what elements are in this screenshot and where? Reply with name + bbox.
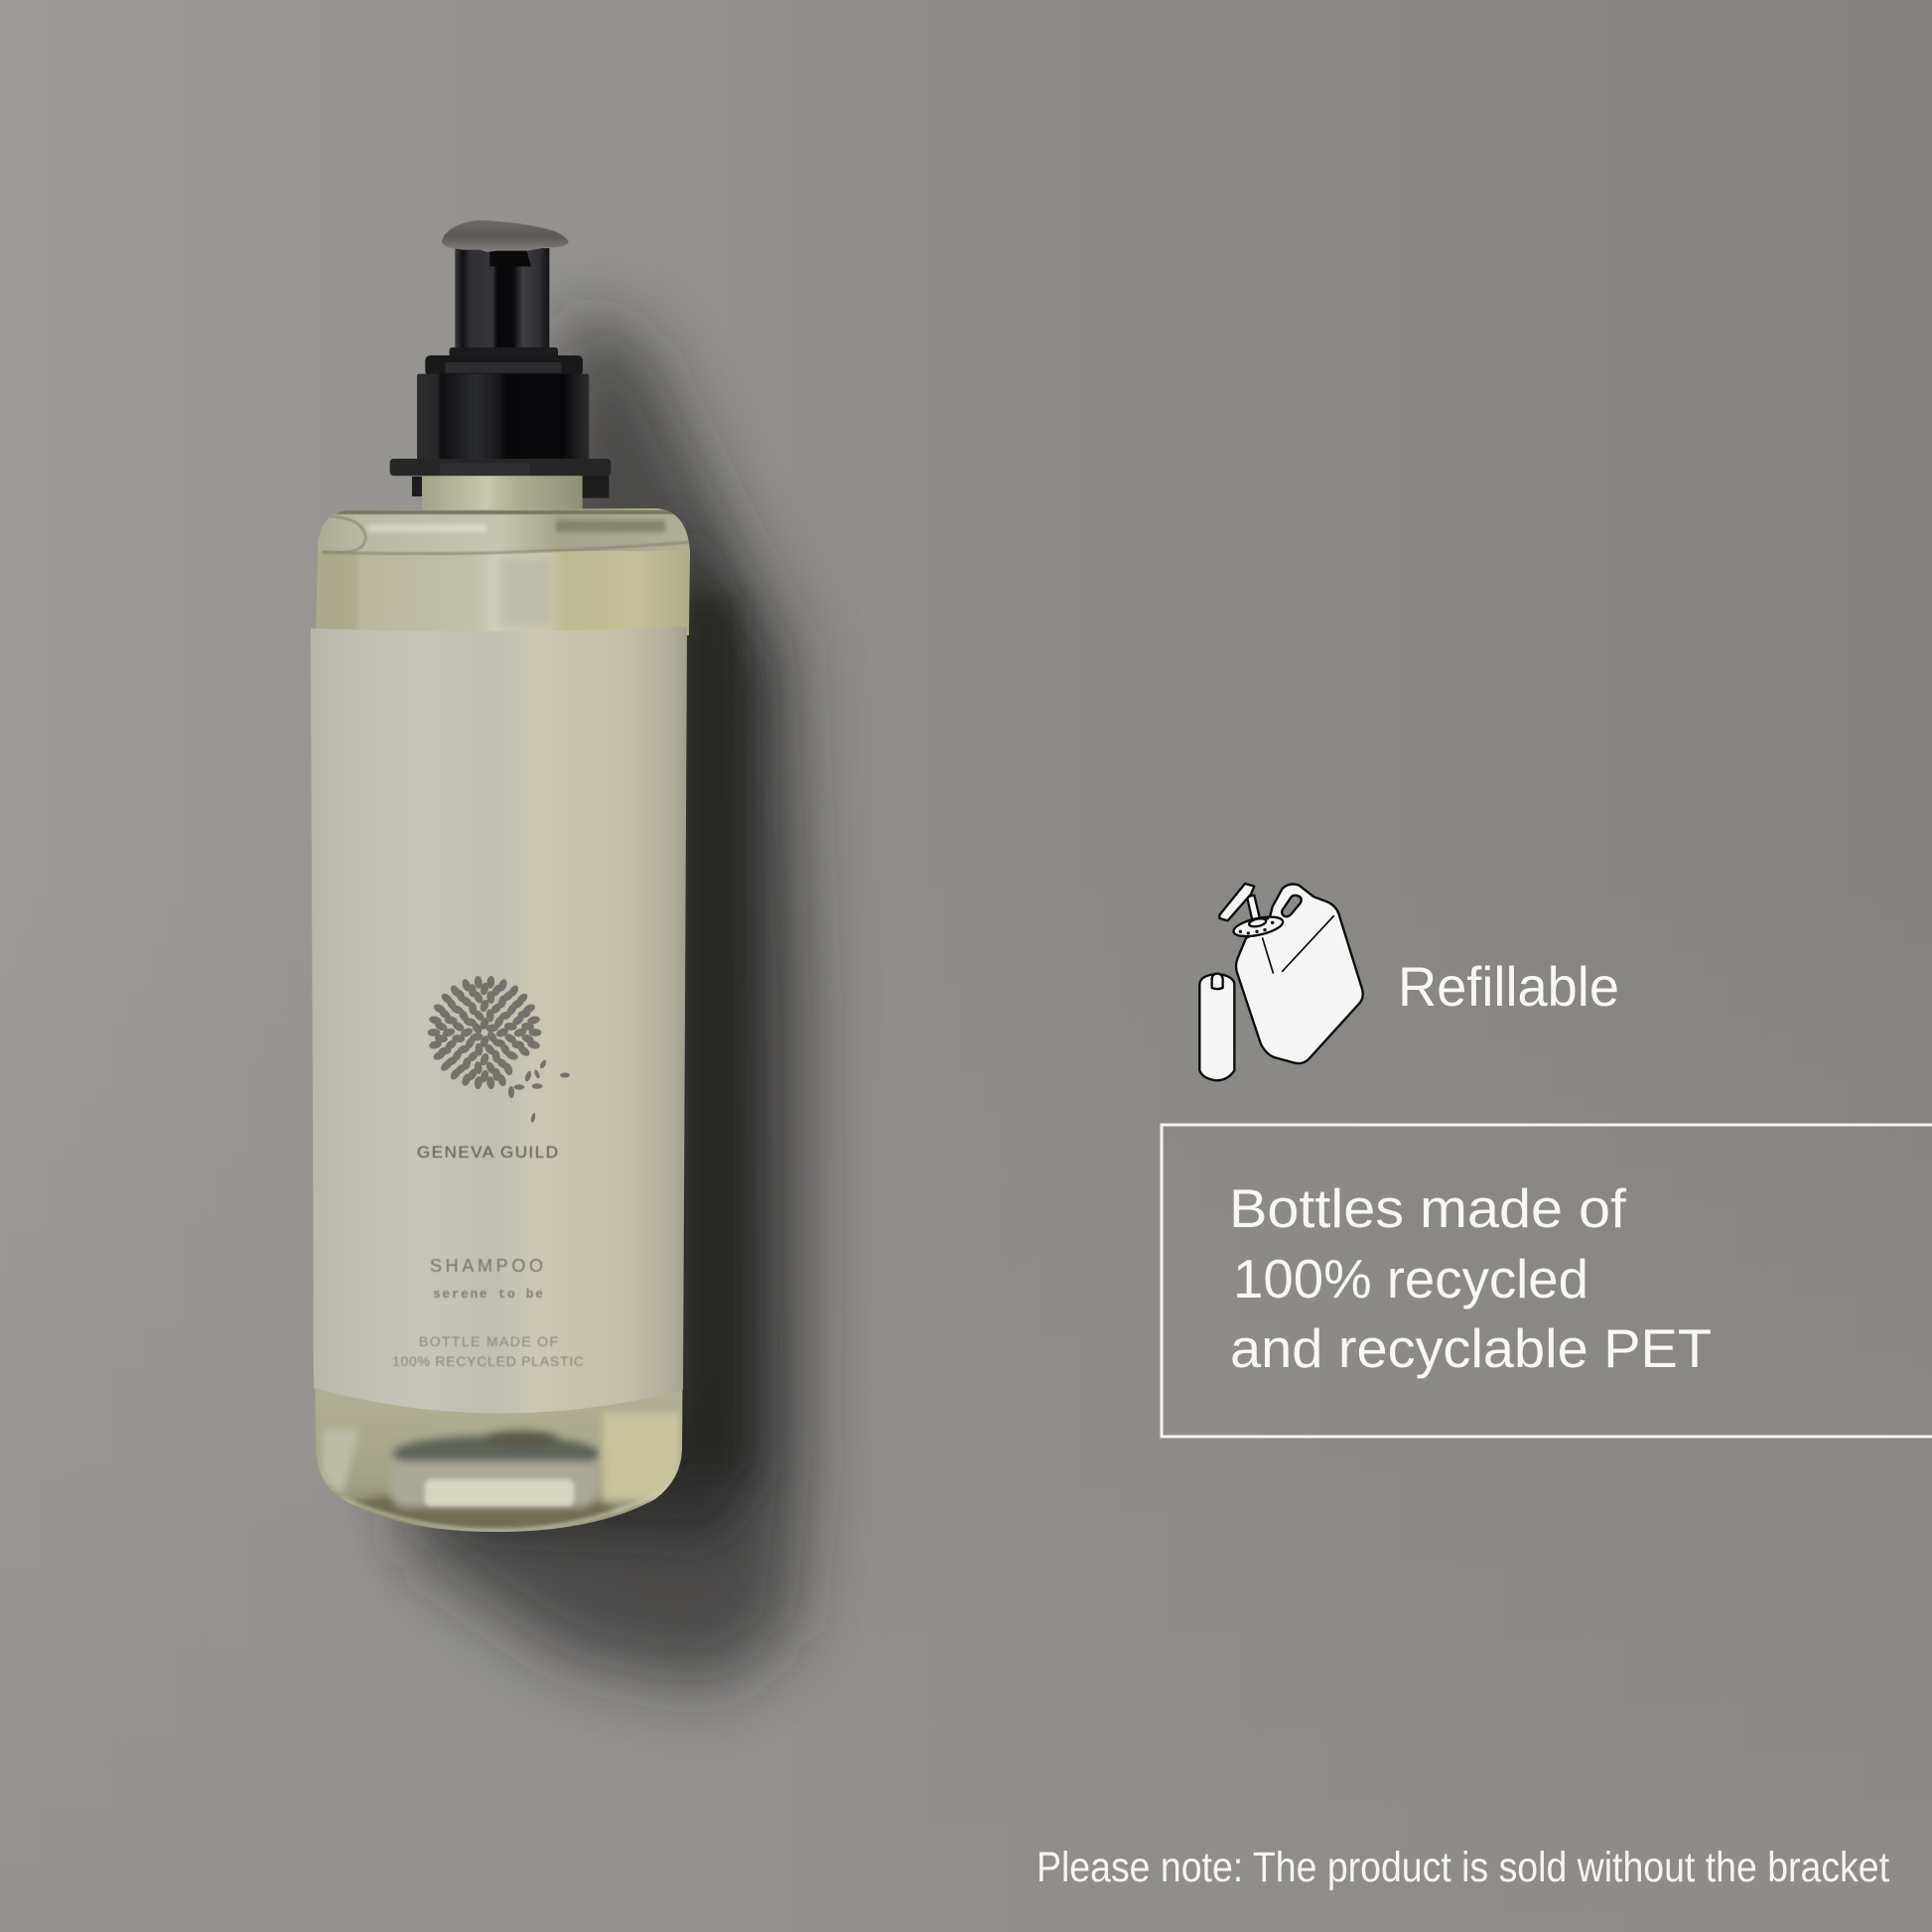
product label [311, 626, 687, 1414]
callout text: 100% recycled [1233, 1248, 1588, 1310]
callout text [1229, 1177, 1712, 1379]
label text: brand: GENEVA GUILD [417, 1143, 558, 1162]
icon: refill canister and bottle [1199, 884, 1363, 1080]
icon: canister [1236, 885, 1363, 1063]
bottle [308, 220, 695, 1539]
recycled PET callout box [1162, 1125, 1932, 1437]
label text: recycled note: BOTTLE MADE OF [419, 1333, 558, 1349]
bottle body [308, 501, 695, 1539]
pump dispenser [390, 220, 611, 511]
refillable label: Refillable [1398, 955, 1619, 1018]
label text: tagline: serene to be [433, 1287, 543, 1302]
icon: small bottle [1199, 974, 1234, 1080]
callout text: and recyclable PET [1230, 1317, 1712, 1379]
logo: leaf flower [428, 976, 570, 1123]
icon: pump [1219, 884, 1285, 940]
callout text: Bottles made of [1229, 1177, 1627, 1239]
bottle shadow [397, 308, 809, 1688]
label text: product name: SHAMPOO [430, 1256, 543, 1276]
label text: recycled note: 100% RECYCLED PLASTIC [392, 1353, 584, 1369]
label text: recycled note [392, 1333, 584, 1369]
